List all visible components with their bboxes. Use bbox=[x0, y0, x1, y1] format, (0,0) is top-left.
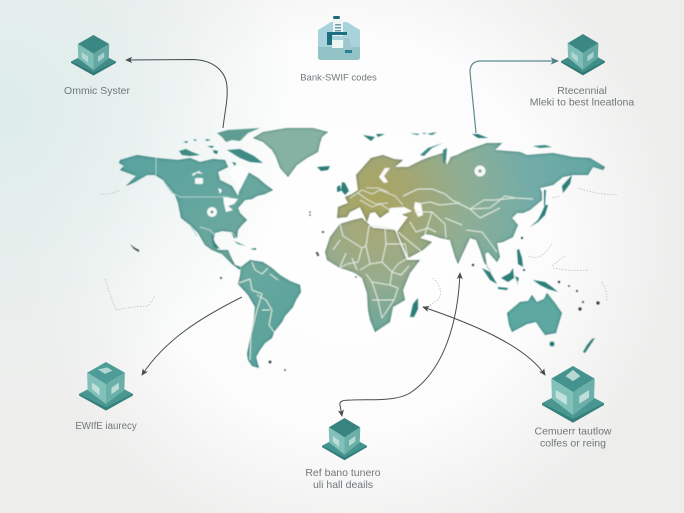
country borders bbox=[156, 158, 533, 360]
arrow: to Ref bano tunero bbox=[340, 273, 460, 416]
world map bbox=[119, 128, 605, 371]
label: Ommic Syster: Ommic Syster bbox=[64, 85, 130, 97]
label: Cemuerr tautlow bbox=[534, 426, 612, 450]
label: Rtecennial: Rtecennial bbox=[557, 85, 607, 97]
label: EWIfE iaurecy: EWIfE iaurecy bbox=[75, 421, 137, 432]
icon: bottom right cube bbox=[542, 366, 604, 423]
icon: top left cube bbox=[71, 35, 116, 76]
seas and lakes bbox=[218, 165, 423, 226]
north america bbox=[119, 155, 273, 270]
continents bbox=[119, 128, 605, 368]
label: Rtecennial bbox=[530, 85, 634, 108]
africa bbox=[325, 218, 420, 332]
greenland bbox=[253, 128, 328, 177]
label: Cemuerr tautlow: colfes or reing bbox=[540, 438, 606, 450]
dotted routes bbox=[100, 188, 617, 310]
icon: bottom left cube bbox=[79, 362, 133, 411]
label: Bank-SWIF codes: Bank-SWIF codes bbox=[300, 72, 377, 84]
label: Ref bano tunero bbox=[305, 467, 381, 491]
label: Cemuerr tautlow: Cemuerr tautlow bbox=[534, 426, 612, 438]
map marker: usa bbox=[207, 207, 217, 217]
label: Ref bano tunero: Ref bano tunero bbox=[305, 467, 381, 479]
icon: top right cube bbox=[561, 34, 605, 75]
arrow: to EWIfE iaurecy bbox=[142, 297, 242, 375]
scattered dots bbox=[220, 211, 600, 371]
arrow: to Ommic Syster bbox=[126, 60, 227, 128]
labels bbox=[64, 72, 634, 491]
map marker: north america top bbox=[192, 171, 203, 184]
arrow: to Cemuerr tautlow bbox=[423, 307, 545, 375]
map marker: russia bbox=[474, 166, 486, 176]
map marker glyphs bbox=[210, 169, 482, 214]
icon: bottom center cube bbox=[322, 418, 367, 460]
label: Rtecennial: Mleki to best lneatlona bbox=[530, 96, 634, 108]
australia bbox=[507, 293, 562, 335]
south america bbox=[238, 260, 301, 368]
icon: bank document bbox=[318, 16, 360, 60]
east asia islands bbox=[130, 175, 595, 353]
eurasia bbox=[337, 143, 605, 273]
arctic islands bbox=[179, 128, 552, 195]
label: Ref bano tunero: uli hall deails bbox=[313, 479, 373, 491]
arrow: to Rtecennial bbox=[470, 61, 558, 133]
